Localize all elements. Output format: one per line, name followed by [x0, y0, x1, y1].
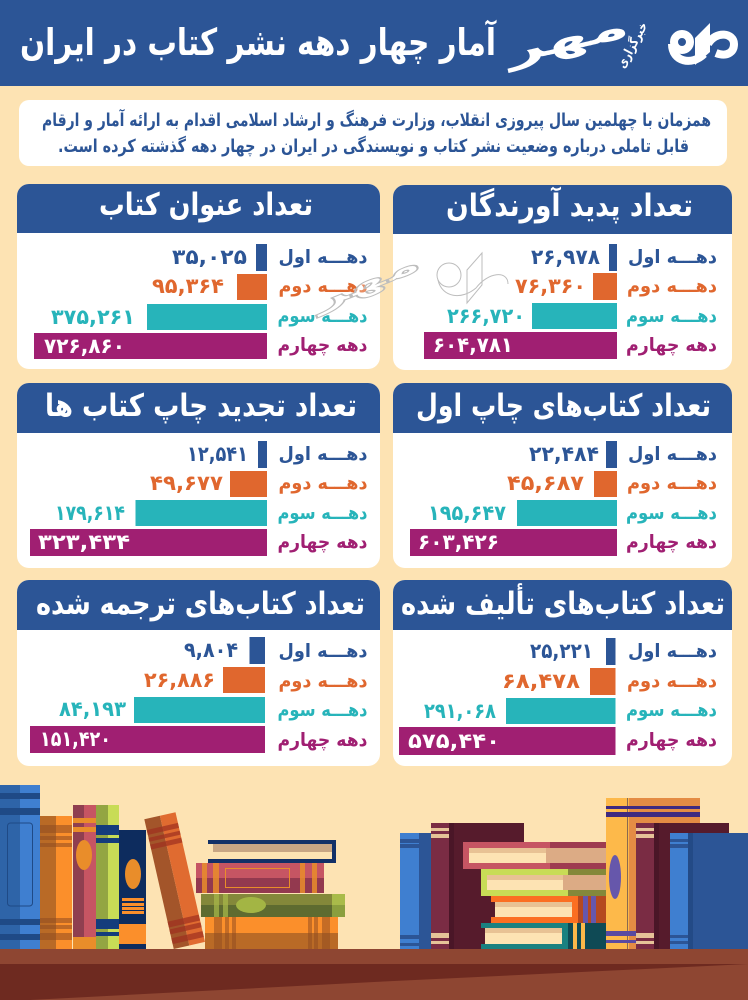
illustration: right books	[400, 798, 748, 949]
heading: تعداد عنوان کتاب	[99, 187, 313, 223]
title: آمار چهار دهه نشر کتاب در ایران	[20, 19, 497, 64]
logo: Mehr news agency	[498, 5, 734, 73]
row: third decade	[55, 500, 368, 526]
row: third decade	[428, 500, 717, 526]
heading: تعداد تجدید چاپ کتاب ها	[45, 388, 357, 424]
row: first decade: دهـــه اول	[278, 247, 368, 268]
row: first decade	[184, 637, 368, 664]
book: navy	[119, 830, 146, 949]
row: second decade: دهـــه دوم	[278, 473, 368, 494]
row: third decade: دهـــه سوم	[626, 306, 717, 327]
row: fourth decade	[34, 333, 368, 359]
row: second decade: ۴۹,۶۷۷	[150, 471, 223, 495]
book: orange	[205, 917, 338, 949]
row: second decade: ۷۶,۳۶۰	[515, 274, 586, 298]
book: orange stacked	[491, 896, 606, 923]
row: fourth decade: دهه چهارم	[626, 335, 717, 356]
panel: reprints	[17, 383, 380, 568]
row: fourth decade: دهه چهارم	[278, 532, 368, 553]
book: green stacked	[481, 869, 606, 896]
row: second decade: دهـــه دوم	[278, 671, 368, 692]
row: first decade: ۲۶,۹۷۸	[531, 245, 600, 269]
book: green	[96, 805, 119, 949]
book: maroon	[431, 823, 524, 949]
row: second decade: ۹۵,۳۶۴	[152, 274, 224, 298]
row: third decade	[447, 303, 717, 329]
illustration: left upright books	[0, 785, 205, 949]
row: third decade: ۱۷۹,۶۱۴	[55, 501, 125, 525]
book: pink	[196, 863, 324, 893]
row: fourth decade: دهه چهارم	[278, 730, 368, 751]
row: second decade: ۴۵,۶۸۷	[507, 471, 584, 495]
row: fourth decade	[30, 726, 368, 753]
row: third decade: ۸۴,۱۹۳	[59, 697, 126, 721]
book: blue	[0, 785, 40, 949]
row: third decade: ۱۹۵,۶۴۷	[428, 501, 506, 525]
row: second decade: دهـــه دوم	[627, 473, 717, 494]
logo: Mehr news agency: خبرگزاری	[614, 19, 651, 71]
row: second decade	[150, 471, 368, 497]
row: fourth decade: دهه چهارم	[626, 532, 717, 553]
row: third decade: دهـــه سوم	[626, 700, 717, 721]
row: fourth decade: ۵۷۵,۴۴۰	[408, 729, 500, 753]
row: second decade	[507, 471, 717, 497]
book: maroon front	[636, 823, 729, 949]
panel: book titles	[17, 184, 380, 369]
intro text box	[19, 100, 727, 166]
book: pink	[73, 805, 96, 949]
row: fourth decade	[410, 529, 717, 556]
book: leaning orange	[144, 812, 205, 949]
row: third decade: ۲۹۱,۰۶۸	[424, 699, 496, 723]
panel: authored books	[393, 580, 732, 766]
row: third decade: دهـــه سوم	[278, 306, 368, 327]
row: third decade: ۲۶۶,۷۲۰	[447, 304, 525, 328]
row: third decade: دهـــه سوم	[626, 503, 717, 524]
row: third decade	[51, 304, 368, 330]
heading: تعداد پدید آورندگان	[446, 186, 693, 224]
row: first decade: دهـــه اول	[628, 641, 717, 662]
row: second decade	[152, 274, 368, 300]
header banner	[0, 0, 748, 86]
book: orange	[40, 816, 72, 949]
row: second decade: دهـــه دوم	[278, 276, 368, 297]
book: green	[201, 894, 345, 917]
row: fourth decade	[424, 332, 717, 359]
row: first decade	[529, 441, 717, 468]
book: pink stacked	[463, 842, 606, 869]
row: first decade: دهـــه اول	[278, 641, 368, 662]
row: first decade: دهـــه اول	[628, 247, 717, 268]
illustration: wooden shelf	[0, 949, 748, 1000]
row: third decade	[59, 697, 368, 723]
row: second decade: دهـــه دوم	[627, 671, 717, 692]
row: third decade: دهـــه سوم	[278, 503, 368, 524]
panel: translated books	[17, 580, 380, 766]
panel: creators	[393, 185, 732, 370]
row: first decade: ۲۵,۲۲۱	[530, 639, 593, 663]
book: navy top	[208, 840, 336, 863]
row: second decade	[144, 667, 368, 693]
row: first decade: دهـــه اول	[628, 444, 717, 465]
logo: Mehr news agency: مهر	[498, 5, 633, 73]
book: blue back	[400, 833, 431, 949]
row: first decade: ۳۵,۰۲۵	[172, 245, 247, 269]
row: fourth decade: ۶۰۴,۷۸۱	[433, 333, 513, 357]
row: second decade: دهـــه دوم	[627, 276, 717, 297]
row: fourth decade: دهه چهارم	[278, 335, 368, 356]
row: second decade	[502, 668, 717, 695]
row: second decade: ۲۶,۸۸۶	[144, 668, 215, 692]
row: third decade: دهـــه سوم	[278, 700, 368, 721]
row: third decade	[424, 698, 717, 724]
watermark	[306, 246, 508, 318]
row: first decade	[531, 244, 717, 271]
row: third decade: ۳۷۵,۲۶۱	[51, 305, 135, 329]
book: teal stacked	[481, 923, 606, 949]
panel: first-print books	[393, 383, 732, 568]
book: blue front	[670, 833, 748, 949]
row: fourth decade: ۳۲۳,۴۳۴	[38, 530, 130, 554]
book: yellow upright	[606, 798, 700, 949]
row: first decade	[530, 638, 717, 665]
row: second decade: ۶۸,۴۷۸	[502, 669, 580, 693]
row: fourth decade	[399, 727, 717, 755]
row: first decade: ۱۲,۵۴۱	[187, 442, 248, 466]
row: first decade: ۹,۸۰۴	[184, 638, 238, 662]
row: fourth decade: ۶۰۳,۴۲۶	[418, 530, 499, 554]
row: fourth decade: ۱۵۱,۴۲۰	[40, 727, 111, 751]
watermark: مهر	[306, 246, 425, 318]
row: first decade	[172, 244, 368, 271]
heading: تعداد کتاب‌های ترجمه شده	[36, 586, 365, 622]
row: second decade	[515, 273, 717, 300]
row: first decade: دهـــه اول	[278, 444, 368, 465]
row: first decade	[187, 441, 368, 468]
row: fourth decade: ۷۲۶,۸۶۰	[44, 334, 125, 358]
row: first decade: ۲۲,۴۸۴	[529, 442, 599, 466]
illustration: left book stack	[196, 840, 345, 949]
row: fourth decade	[30, 529, 368, 556]
row: fourth decade: دهه چهارم	[626, 730, 717, 751]
